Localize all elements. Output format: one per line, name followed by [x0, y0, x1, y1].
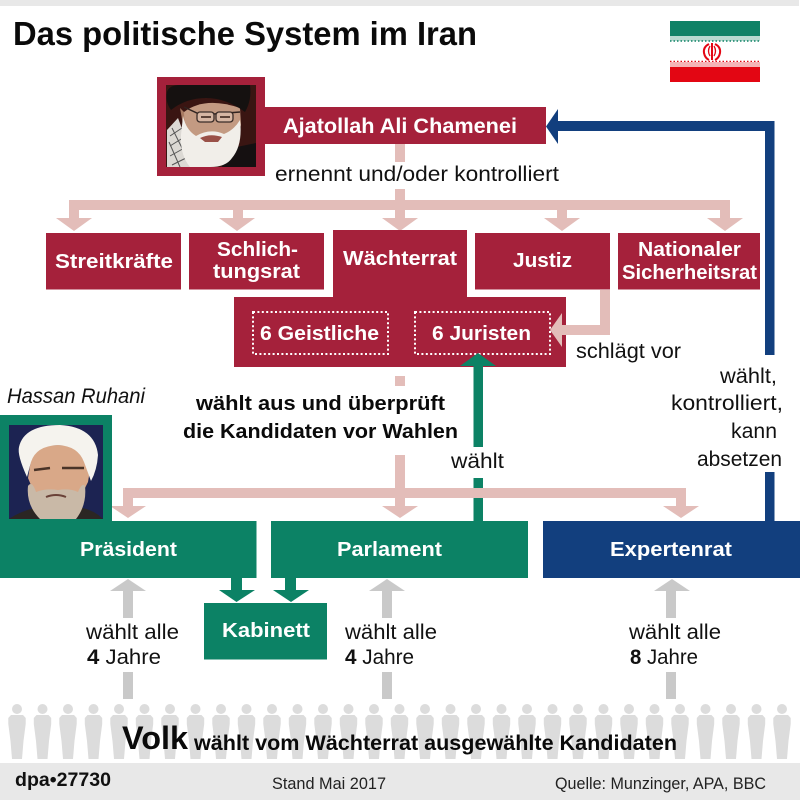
text: Volk wählt vom Wächterrat ausgewählte Kandidaten: wählt vom Wächterrat ausgewählte Kandidaten	[193, 732, 677, 755]
panel: Schlichtungsrat: Schlich-	[217, 239, 298, 261]
panel: Streitkräfte: Streitkräfte	[55, 251, 173, 273]
panel: Ajatollah Ali Chamenei	[157, 77, 546, 176]
panel: Streitkräfte	[46, 233, 181, 290]
panel: Nationaler Sicherheitsrat: Sicherheitsrat	[622, 262, 757, 284]
text: wählt aus und überprüft	[183, 393, 458, 443]
panel: Schlichtungsrat	[189, 233, 324, 290]
label: Hassan Ruhani: Hassan Ruhani	[7, 385, 146, 408]
arrow: Parlament elects Juristen	[460, 353, 496, 522]
footer	[0, 763, 800, 800]
box: 6 Juristen: 6 Juristen	[432, 323, 531, 345]
label: wählt alle 4 Jahre (Parlament)	[344, 621, 437, 669]
box: 6 Geistliche	[253, 312, 388, 354]
portrait: Chamenei	[166, 85, 256, 167]
label: wählt alle 8 Jahre (Expertenrat)	[628, 621, 721, 669]
panel: Justiz	[475, 233, 610, 290]
label: wählt alle 4 Jahre (Präsident): wählt alle	[85, 621, 179, 644]
arrow: Expertenrat elects Chamenei	[546, 109, 774, 522]
panel: Expertenrat	[543, 521, 800, 578]
arrow: Wächterrat vets candidates	[110, 376, 699, 518]
icon: flag of Iran	[670, 21, 760, 82]
label: wählt alle 8 Jahre (Expertenrat): wählt alle	[628, 621, 721, 644]
label: ernennt und/oder kontrolliert: ernennt und/oder kontrolliert	[275, 163, 559, 186]
panel: Kabinett: Kabinett	[222, 620, 310, 642]
label: schlägt vor: schlägt vor	[576, 340, 681, 363]
panel: Wächterrat	[234, 230, 566, 367]
label: wählt alle 4 Jahre (Präsident)	[85, 621, 179, 669]
credit: dpa: dpa•27730	[15, 770, 111, 791]
icon row: crowd of people	[8, 704, 791, 759]
label: wählt, kontrolliert, kann absetzen: kontrolliert,	[671, 392, 783, 415]
arrows: Präsident and Parlament to Kabinett	[219, 578, 309, 602]
text: wählt aus und überprüft: die Kandidaten vor Wahlen	[183, 421, 458, 443]
text: Volk wählt vom Wächterrat ausgewählte Kandidaten: Volk	[122, 720, 188, 756]
panel: Justiz: Justiz	[513, 250, 572, 272]
label: wählt alle 8 Jahre (Expertenrat): 8 Jahre	[630, 646, 698, 669]
label: wählt, kontrolliert, kann absetzen	[671, 365, 783, 471]
text: Volk wählt vom Wächterrat ausgewählte Kandidaten	[122, 720, 677, 756]
label: wählt alle 4 Jahre (Parlament): 4 Jahre	[345, 646, 414, 669]
box: 6 Juristen	[415, 312, 550, 354]
panel: Nationaler Sicherheitsrat: Nationaler	[638, 239, 741, 261]
panel: Präsident: Präsident	[80, 539, 177, 561]
panel: Parlament	[271, 521, 528, 578]
arrow: Chamenei down to institutions	[56, 144, 743, 231]
label: wählt alle 4 Jahre (Präsident): 4 Jahre	[87, 646, 161, 669]
text: wählt aus und überprüft: wählt aus und überprüft	[195, 393, 445, 415]
panel: Kabinett	[204, 603, 327, 660]
title: Das politische System im Iran	[13, 15, 477, 52]
arrows: people elect	[110, 579, 690, 699]
panel: Expertenrat: Expertenrat	[610, 539, 732, 561]
panel: Nationaler Sicherheitsrat	[618, 233, 760, 290]
label: wählt, kontrolliert, kann absetzen: absetzen	[697, 448, 782, 471]
arrow: Justiz proposes Juristen	[550, 290, 610, 347]
label: wählt alle 4 Jahre (Parlament): wählt alle	[344, 621, 437, 644]
label: wählt: wählt	[450, 450, 504, 473]
label: wählt, kontrolliert, kann absetzen: kann	[731, 420, 777, 443]
box: 6 Geistliche: 6 Geistliche	[260, 323, 379, 345]
panel: Parlament: Parlament	[337, 539, 442, 561]
panel: Wächterrat: Wächterrat	[343, 248, 457, 270]
panel: Präsident	[0, 415, 256, 578]
source: Quelle: Munzinger, APA, BBC	[555, 774, 766, 793]
panel: Ajatollah Ali Chamenei: Ajatollah Ali Chamenei	[283, 114, 517, 138]
date: Stand Mai 2017	[272, 774, 386, 793]
label: wählt, kontrolliert, kann absetzen: wählt,	[719, 365, 777, 388]
panel: Schlichtungsrat: tungsrat	[213, 261, 300, 283]
portrait: Ruhani	[9, 425, 103, 519]
